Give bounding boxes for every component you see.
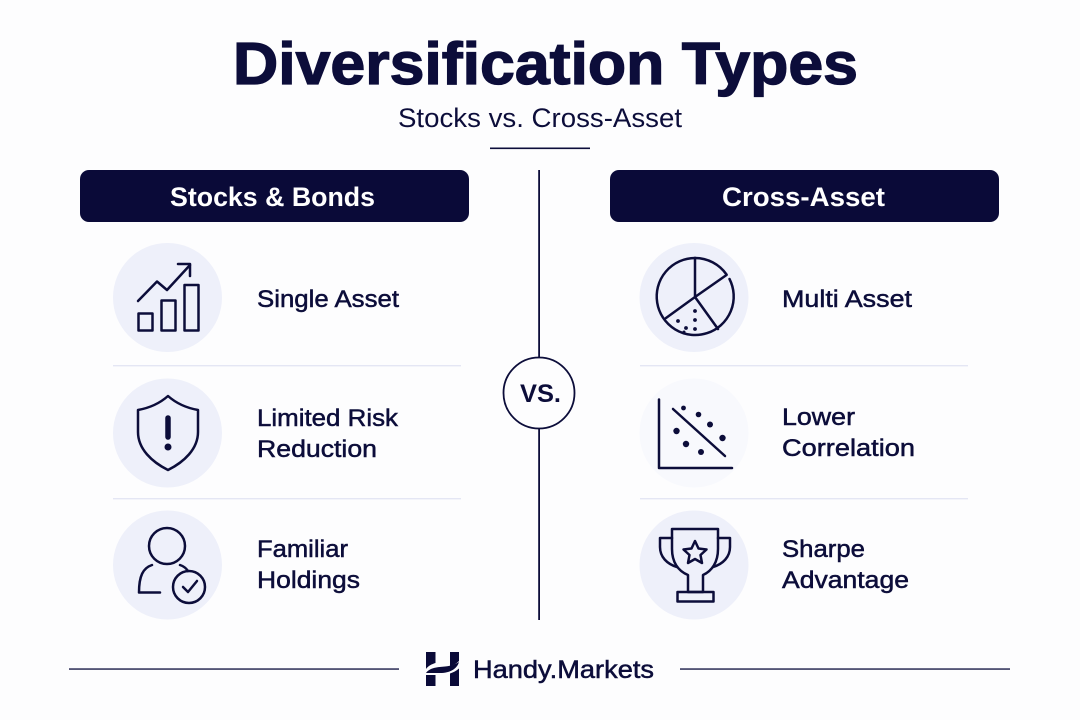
label: familiar holdings: Holdings (257, 567, 360, 594)
panel: cross-asset (610, 170, 999, 620)
row: limited risk reduction (113, 378, 399, 488)
label: lower correlation: Lower (782, 404, 855, 431)
subtitle: Stocks vs. Cross-Asset (398, 103, 683, 133)
vs badge: VS. (520, 380, 561, 408)
row: single asset (113, 243, 399, 352)
label: single asset: Single Asset (257, 286, 399, 313)
logo wordmark: Handy.Markets (473, 656, 654, 684)
column heading: cross-asset: Cross-Asset (722, 182, 885, 212)
column heading: stocks and bonds (80, 170, 469, 222)
column heading: stocks and bonds: Stocks & Bonds (170, 182, 375, 212)
label: lower correlation: Correlation (782, 435, 915, 462)
icon: trophy with star (660, 529, 730, 602)
icon: growth chart (138, 264, 198, 330)
title: Diversification Types (233, 31, 858, 97)
header (233, 31, 858, 149)
panel: stocks and bonds (80, 170, 469, 620)
icon: scatter plot (659, 400, 732, 468)
logo mark (426, 652, 459, 686)
column heading: cross-asset (610, 170, 999, 222)
icon: pie chart (657, 258, 734, 335)
row: multi asset (640, 243, 912, 352)
label: sharpe advantage: Advantage (782, 567, 909, 594)
vs badge (504, 358, 574, 428)
icon: shield with exclamation (138, 396, 198, 470)
footer (69, 652, 1010, 686)
label: familiar holdings: Familiar (257, 536, 348, 563)
icon: person with check (139, 528, 205, 603)
center divider with vs badge (504, 170, 574, 620)
row: sharpe advantage (640, 510, 909, 620)
row: familiar holdings (113, 510, 360, 620)
label: limited risk reduction: Reduction (257, 436, 377, 463)
title underline (490, 148, 590, 149)
label: sharpe advantage: Sharpe (782, 536, 865, 563)
label: limited risk reduction: Limited Risk (257, 405, 399, 432)
row: lower correlation (640, 378, 915, 488)
label: multi asset: Multi Asset (782, 286, 912, 313)
